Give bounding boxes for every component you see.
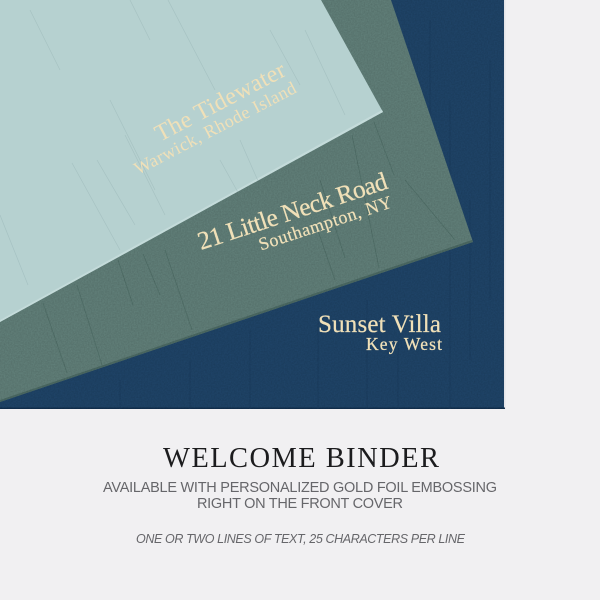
description: AVAILABLE WITH PERSONALIZED GOLD FOIL EMBOSSING <box>103 480 497 496</box>
foil text: The Tidewater <box>131 57 300 179</box>
green binder <box>0 0 473 402</box>
foil text: Sunset Villa: Sunset Villa <box>318 311 441 338</box>
light aqua binder <box>0 0 383 322</box>
foil text: Sunset Villa <box>318 311 442 354</box>
foil text: The Tidewater: The Tidewater <box>151 57 290 147</box>
title: WELCOME BINDER <box>163 443 439 474</box>
foil text: Southampton, NY: Southampton, NY <box>256 192 394 254</box>
navy binder <box>0 0 506 409</box>
infographic canvas <box>0 0 506 545</box>
description <box>103 480 497 512</box>
foil text: Key West: Key West <box>366 334 442 354</box>
foil text: Warwick, Rhode Island: Warwick, Rhode Island <box>131 78 300 179</box>
foil text: 21 Little Neck Road: 21 Little Neck Road <box>194 166 391 256</box>
note: ONE OR TWO LINES OF TEXT, 25 CHARACTERS PER LINE <box>136 532 466 546</box>
description: RIGHT ON THE FRONT COVER <box>197 496 403 512</box>
